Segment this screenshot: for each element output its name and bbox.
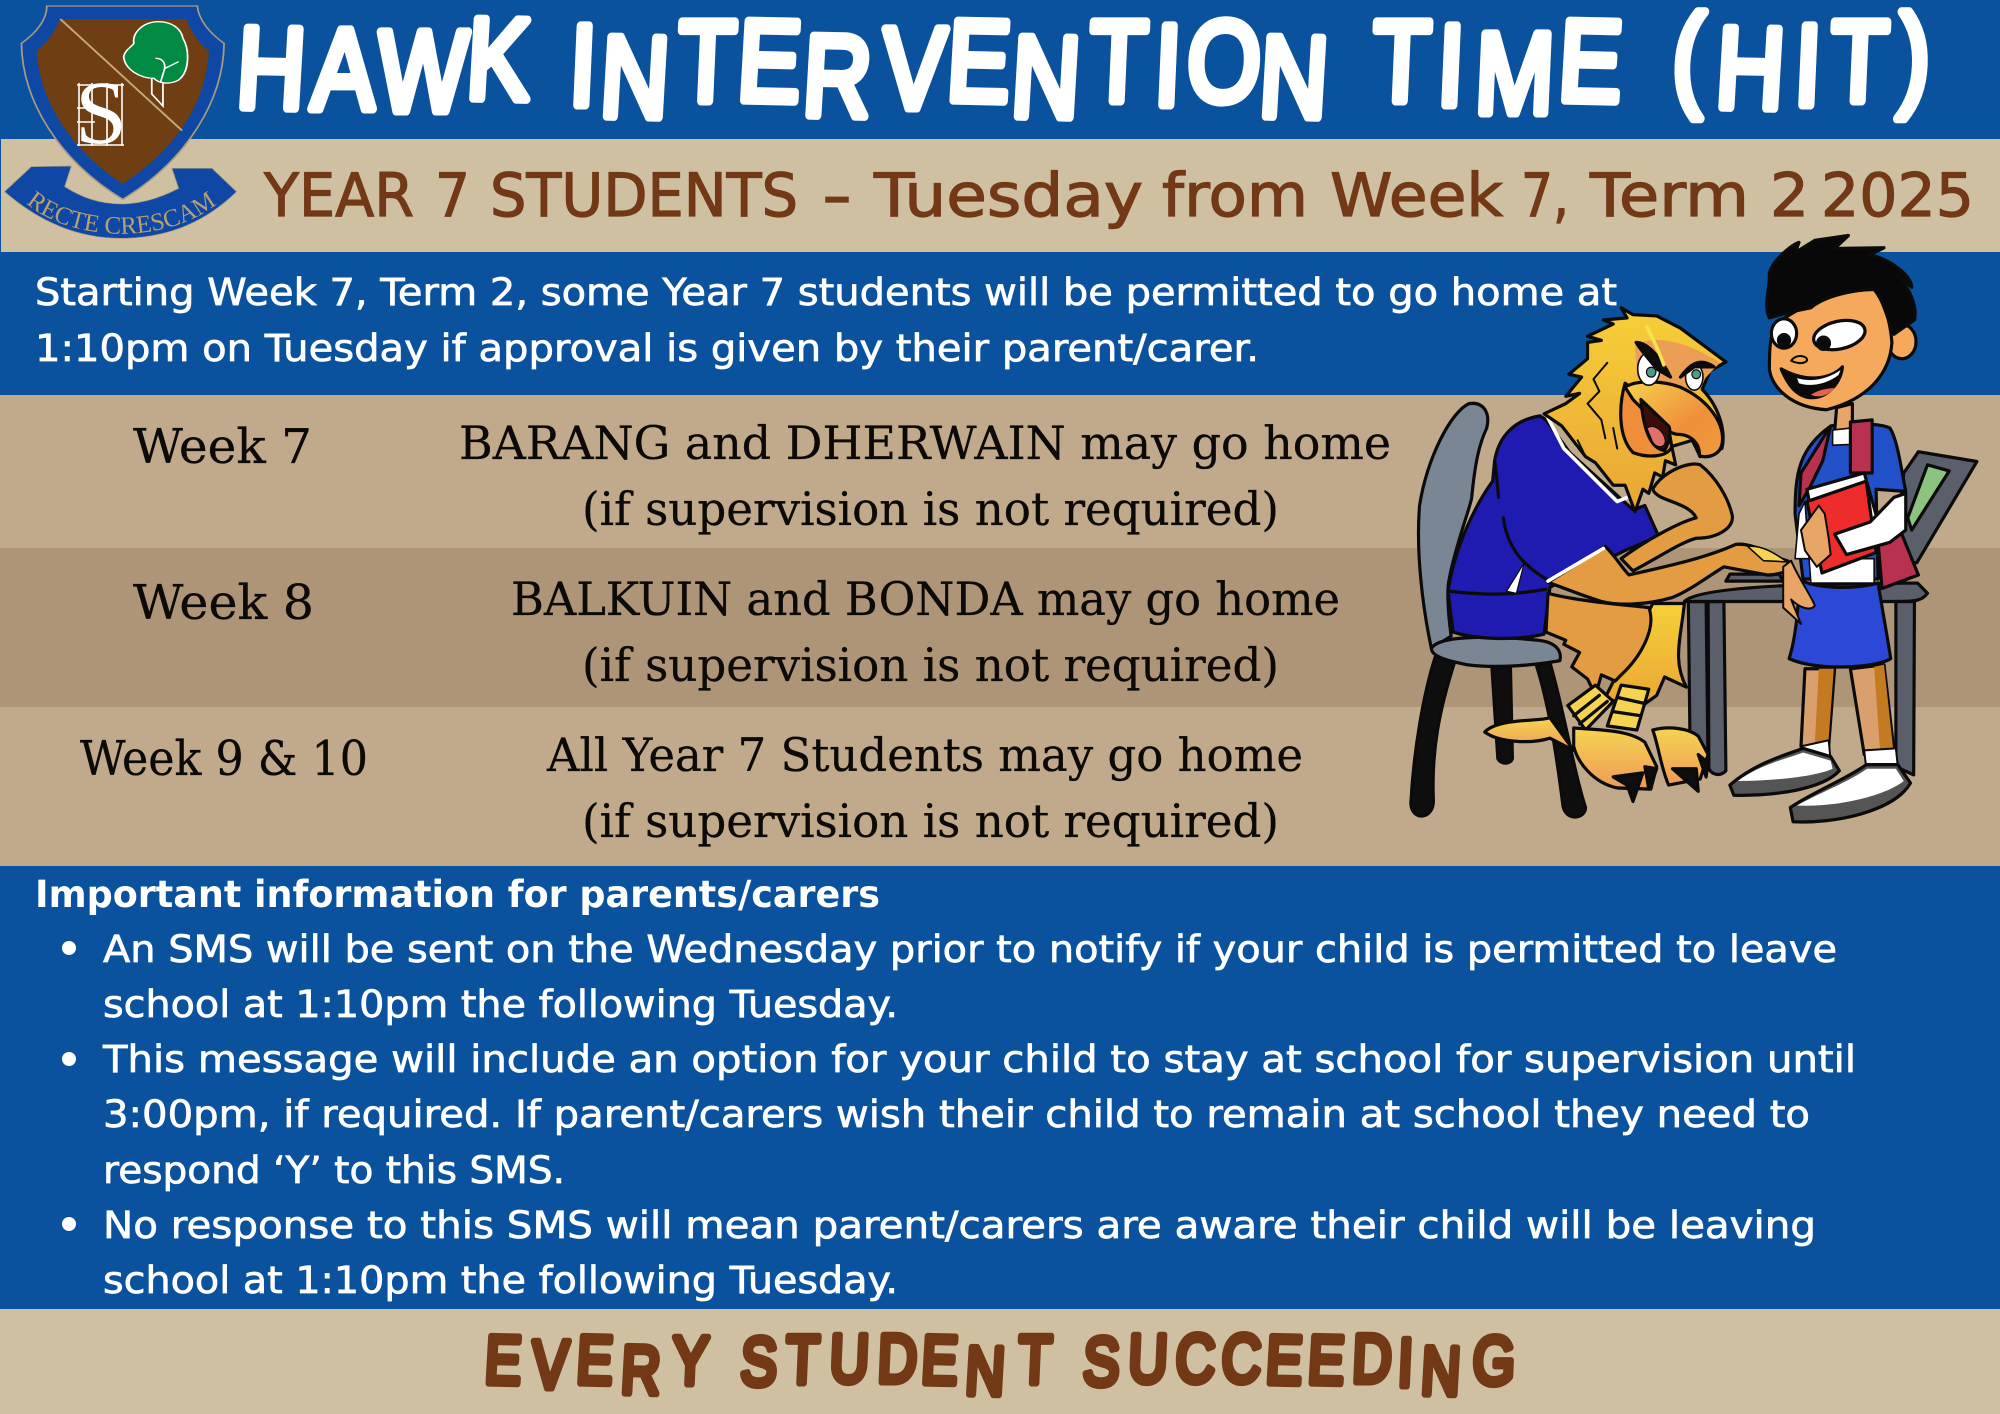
bullet two: This message will include an option for your child to stay at school for supervision until	[102, 1038, 1856, 1081]
week 8 row: (if supervision is not required)	[582, 638, 1279, 692]
week 7 row: Week 7	[133, 419, 312, 475]
week 9 and 10 row: Week 9 & 10	[80, 731, 368, 787]
week 9 and 10 row: (if supervision is not required)	[582, 794, 1279, 848]
subtitle: Week	[1330, 161, 1503, 231]
week 8 row: Week 8	[133, 575, 314, 631]
bullet three	[62, 1204, 1816, 1302]
bullet two	[62, 1038, 1856, 1192]
motto: RECTE CRESCAM	[26, 190, 216, 234]
schedule row: week 8 background	[0, 548, 2000, 707]
bullet three: school at 1:10pm the following Tuesday.	[103, 1259, 898, 1302]
footer band	[0, 1309, 2000, 1414]
school crest	[4, 5, 237, 239]
subtitle	[263, 161, 1974, 231]
subtitle: -	[822, 161, 852, 231]
schedule row: week 9 and 10 background	[0, 707, 2000, 866]
bullet two: 3:00pm, if required. If parent/carers wish their child to remain at school they need to	[103, 1093, 1810, 1136]
monogram: S	[75, 64, 127, 163]
bullet one: school at 1:10pm the following Tuesday.	[103, 983, 898, 1026]
bullet one: An SMS will be sent on the Wednesday prior to notify if your child is permitted to leave	[103, 928, 1837, 971]
subtitle: 2	[1770, 161, 1809, 231]
subtitle: 2025	[1821, 161, 1974, 231]
week 9 and 10 row	[80, 728, 1303, 848]
header band	[0, 0, 2000, 139]
subtitle band	[1, 139, 2000, 252]
bullet three: No response to this SMS will mean parent/carers are aware their child will be leaving	[103, 1204, 1816, 1247]
illustration: hawk mascot and student	[1411, 236, 1977, 822]
crest shield and ribbon	[4, 6, 237, 238]
information heading: Important information for parents/carers	[35, 873, 880, 916]
subtitle: from	[1162, 161, 1308, 231]
week 7 row: BARANG and DHERWAIN may go home	[459, 416, 1391, 470]
subtitle: YEAR	[263, 161, 414, 231]
student	[1730, 236, 1918, 822]
chair	[1411, 403, 1586, 817]
information band	[0, 866, 2000, 1309]
important information	[35, 873, 1856, 1302]
monitor	[1894, 452, 1977, 563]
subtitle: STUDENTS	[490, 161, 798, 231]
subtitle: 7	[435, 161, 470, 231]
bullet one	[62, 928, 1837, 1026]
footer slogan: EVERY STUDENT SUCCEEDING	[483, 1321, 1517, 1410]
intro text	[35, 271, 1617, 370]
table	[1684, 574, 1927, 775]
week 7 row	[133, 416, 1391, 536]
intro text: Starting Week 7, Term 2, some Year 7 students will be permitted to go home at	[35, 271, 1617, 314]
schedule table text	[80, 416, 1391, 848]
week 7 row: (if supervision is not required)	[582, 482, 1279, 536]
subtitle: Tuesday	[873, 161, 1143, 231]
week 8 row	[133, 572, 1340, 692]
subtitle: Term	[1589, 161, 1749, 231]
subtitle: 7,	[1521, 161, 1569, 231]
week 9 and 10 row: All Year 7 Students may go home	[546, 728, 1303, 782]
hawk	[1448, 308, 1791, 801]
week 8 row: BALKUIN and BONDA may go home	[511, 572, 1340, 626]
intro band	[0, 252, 2000, 395]
bullet two: respond ‘Y’ to this SMS.	[103, 1149, 565, 1192]
intro text: 1:10pm on Tuesday if approval is given by their parent/carer.	[35, 327, 1259, 370]
schedule row: week 7 background	[0, 395, 2000, 548]
